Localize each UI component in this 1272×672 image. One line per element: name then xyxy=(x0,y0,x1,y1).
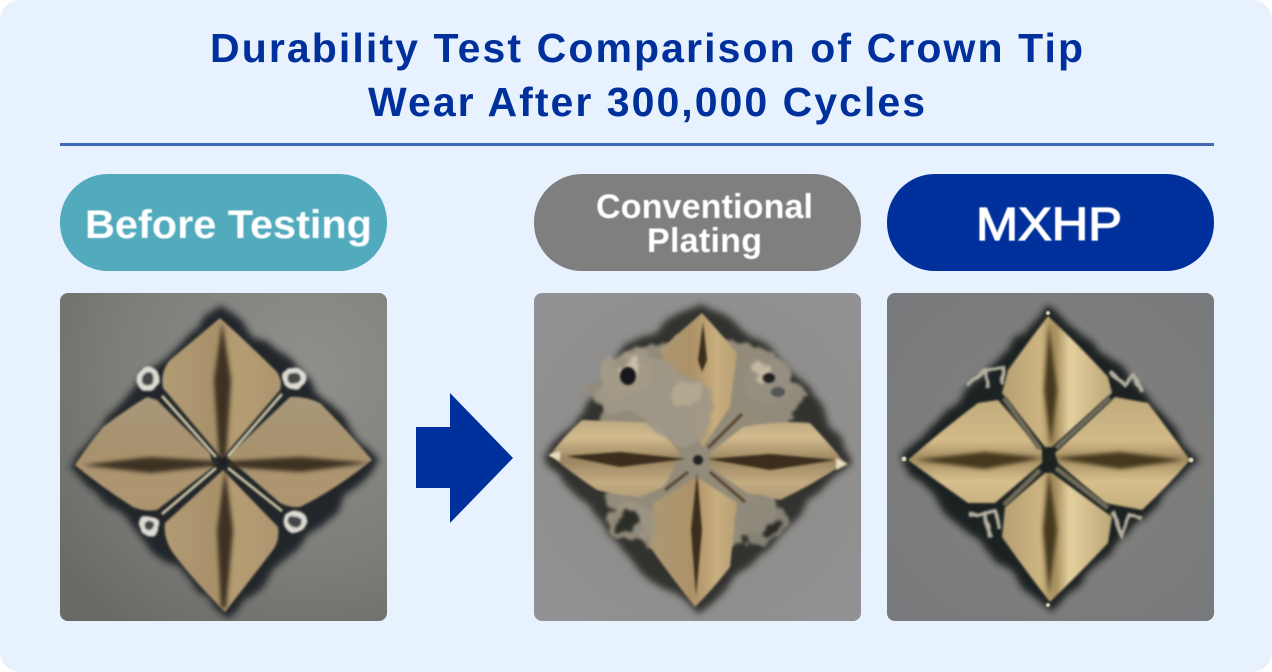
label: conventional plating: Plating xyxy=(647,222,762,260)
right petal xyxy=(1055,397,1190,510)
bottom petal xyxy=(1002,473,1112,602)
title xyxy=(210,25,1083,125)
label: before testing: Before Testing xyxy=(85,203,372,247)
top petal xyxy=(660,313,737,447)
bottom petal xyxy=(165,470,278,612)
label: MXHP: MXHP xyxy=(976,198,1122,250)
title: Wear After 300,000 Cycles xyxy=(368,79,925,125)
right petal xyxy=(227,397,372,507)
title: Durability Test Comparison of Crown Tip xyxy=(210,25,1083,71)
label: conventional plating: Conventional xyxy=(596,188,813,226)
left petal xyxy=(550,420,680,497)
left petal xyxy=(908,400,1042,503)
photo: crown tip before testing xyxy=(60,293,387,621)
right petal xyxy=(710,422,845,500)
bottom petal xyxy=(650,477,737,607)
photo: crown tip with MXHP xyxy=(887,293,1214,621)
left petal xyxy=(75,397,213,511)
label: before testing xyxy=(60,174,387,271)
worn plating damage xyxy=(598,350,794,544)
top petal xyxy=(162,318,281,456)
label: conventional plating xyxy=(534,174,861,271)
photo: crown tip after conventional plating xyxy=(534,293,861,621)
label: MXHP xyxy=(887,174,1214,271)
arrow xyxy=(416,393,513,523)
top petal xyxy=(1002,316,1112,447)
